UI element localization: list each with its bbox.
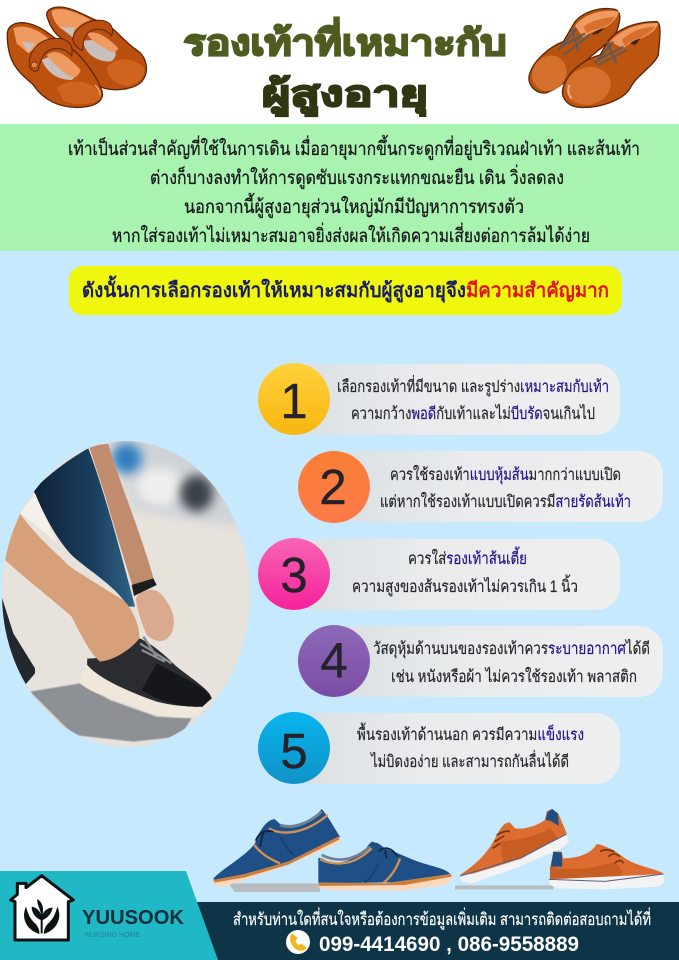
step 4 text: วัสดุหุ้มด้านบนของรองเท้าควรระบายอากาศได้ดี <box>373 639 650 659</box>
step 2 number badge <box>298 451 370 523</box>
step 5 text: พื้นรองเท้าด้านนอก ควรมีความแข็งแรง <box>357 722 584 744</box>
step 3 <box>258 538 620 610</box>
callout: yellow banner: ดังนั้นการเลือกรองเท้าให้เหมาะสมกับผู้สูงอายุจึงมีความสำคัญมาก <box>82 275 609 304</box>
step 1 pill <box>290 364 620 435</box>
intro paragraph: หากใส่รองเท้าไม่เหมาะสมอาจยิ่งส่งผลให้เกิดความเสี่ยงต่อการล้มได้ง่าย <box>112 222 590 247</box>
panel: teal logo block <box>0 871 218 960</box>
step 5 text: ไม่บิดงอง่าย และสามารถกันลื่นได้ดี <box>369 750 569 771</box>
step 5 number badge: 5 <box>280 725 308 779</box>
step 4 pill <box>330 626 663 697</box>
step 1 text <box>337 375 609 423</box>
step 4 number badge <box>298 625 370 697</box>
step 5 text <box>357 722 584 771</box>
step 3 pill <box>290 539 620 610</box>
phone numbers: 099-4414690 , 086-9558889 <box>319 933 579 956</box>
icon: brown lace-up shoes <box>525 9 660 110</box>
step 3 text: ความสูงของส้นรองเท้าไม่ควรเกิน 1 นิ้ว <box>352 574 578 597</box>
callout: yellow banner <box>69 266 622 315</box>
title: ผู้สูงอายุ <box>262 73 428 117</box>
step 4 text <box>373 639 650 686</box>
step 2 text: ควรใช้รองเท้าแบบหุ้มส้นมากกว่าแบบเปิด <box>390 465 621 485</box>
step 1 text: ความกว้างพอดีกับเท้าและไม่บีบรัดจนเกินไป <box>351 404 595 423</box>
step 2 <box>298 451 663 523</box>
step 1 number badge <box>258 363 330 435</box>
intro paragraph: ต่างก็บางลงทำให้การดูดซับแรงกระแทกขณะยืน เดิน วิ่งลดลง <box>150 164 564 189</box>
panel: green introduction <box>0 124 679 251</box>
icon: orange sneakers <box>455 809 664 889</box>
step 1 text: เลือกรองเท้าที่มีขนาด และรูปร่างเหมาะสมกับเท้า <box>337 375 609 397</box>
step 5 <box>258 712 620 784</box>
step 5 pill <box>290 713 620 784</box>
panel: contact bar <box>190 902 679 960</box>
step 1 <box>258 363 620 435</box>
intro paragraph: นอกจากนี้ผู้สูงอายุส่วนใหญ่มักมีปัญหาการทรงตัว <box>184 193 524 219</box>
icon: red Mary Jane shoes <box>7 7 146 107</box>
icon: house and hands logo <box>11 876 73 940</box>
step 3 text: ควรใส่รองเท้าส้นเตี้ย <box>408 546 527 568</box>
brand subtitle: NURSING HOME <box>85 932 140 939</box>
step 4 number badge: 4 <box>320 634 348 688</box>
step 5 number badge <box>258 712 330 784</box>
step 2 pill <box>330 451 663 522</box>
header white band <box>0 0 679 124</box>
brand name: YUUSOOK <box>82 907 185 929</box>
photo: hands tying a running shoe <box>0 437 252 750</box>
icon: phone <box>286 930 310 954</box>
step 1 number badge: 1 <box>280 375 308 429</box>
step 2 text: แต่หากใช้รองเท้าแบบเปิดควรมีสายรัดส้นเท้า <box>380 492 631 511</box>
title: รองเท้าที่เหมาะกับ <box>184 17 506 63</box>
title <box>184 17 506 117</box>
step 3 number badge: 3 <box>280 549 308 603</box>
step 3 number badge <box>258 538 330 610</box>
step 4 <box>298 625 663 697</box>
intro paragraph <box>68 135 640 247</box>
step 2 number badge: 2 <box>319 461 347 515</box>
step 2 text <box>380 465 631 511</box>
step 3 text <box>352 546 578 597</box>
icon: blue sneakers <box>213 809 452 892</box>
